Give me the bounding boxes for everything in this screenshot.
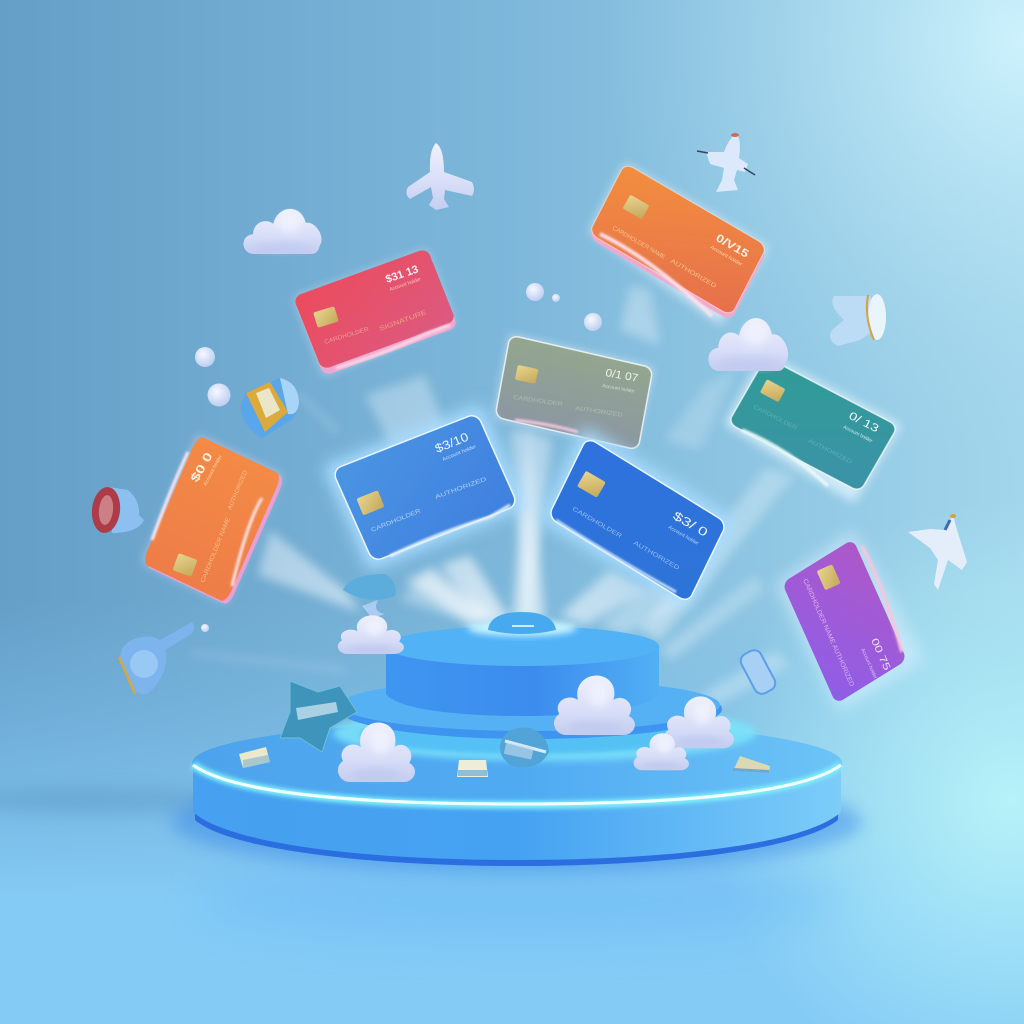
card: orange top right: AUTHORIZED bbox=[669, 259, 718, 290]
card: red: $31 13 bbox=[384, 263, 420, 286]
card: blue right: $3/ 0 bbox=[670, 508, 711, 540]
cloud: front right bbox=[664, 696, 734, 748]
cloud: front left bbox=[338, 722, 415, 782]
card: red: SIGNATURE bbox=[378, 309, 428, 333]
icon: small box left bbox=[239, 747, 270, 768]
card: red: CARDHOLDER bbox=[324, 327, 370, 346]
cloud: on podium top bbox=[338, 615, 404, 654]
card: blue left: Account holder bbox=[442, 444, 477, 463]
card: blue left: CARDHOLDER bbox=[371, 508, 423, 534]
cloud: small front bbox=[634, 733, 689, 770]
podium: base disc bbox=[172, 721, 862, 872]
card: blue right bbox=[548, 437, 727, 603]
card: blue right: Account holder bbox=[667, 525, 700, 547]
card: blue left: $3/10 bbox=[433, 430, 471, 456]
icon: blue star bbox=[280, 681, 357, 752]
card: grey-olive: CARDHOLDER bbox=[513, 395, 564, 408]
cloud: upper right bbox=[708, 318, 788, 371]
card: purple bbox=[775, 530, 925, 712]
card: teal: 0/ 13 bbox=[847, 410, 881, 435]
icon: red coin cylinder bbox=[90, 486, 144, 534]
card: blue right: AUTHORIZED bbox=[632, 541, 681, 572]
card: grey-olive: Account holder bbox=[602, 383, 636, 395]
cloud: upper left bbox=[243, 209, 322, 254]
card: orange top right: CARDHOLDER NAME bbox=[611, 226, 666, 261]
light beams bbox=[190, 285, 795, 705]
card: orange left: Account holder bbox=[202, 454, 224, 487]
card: blue left bbox=[332, 413, 518, 562]
spheres bbox=[195, 283, 602, 632]
card: purple: CARDHOLDER NAME AUTHORIZED bbox=[801, 578, 855, 688]
card: purple: Account holder bbox=[859, 647, 878, 680]
card: teal: AUTHORIZED bbox=[807, 438, 853, 466]
icon: cup top right bbox=[830, 294, 886, 346]
icon: blue half-circle badge bbox=[500, 728, 549, 767]
icon: small tablet centre bbox=[343, 574, 396, 618]
podium: button bbox=[467, 612, 577, 636]
icon: yellow-blue cylinder bbox=[241, 378, 299, 438]
card: orange left: CARDHOLDER NAME bbox=[200, 517, 232, 584]
podium: middle tier bbox=[333, 679, 757, 761]
card: orange top right bbox=[589, 163, 768, 325]
icon: small box centre bbox=[457, 760, 488, 777]
icon: bird right bbox=[908, 514, 967, 590]
card: teal: CARDHOLDER bbox=[752, 404, 798, 432]
card: purple: 00 75 bbox=[868, 637, 892, 673]
card: orange top right: 0/V15 bbox=[714, 232, 751, 261]
card: orange left: AUTHORIZED bbox=[227, 469, 250, 511]
card: red: Account holder bbox=[389, 276, 422, 293]
icon: blob plane left bbox=[119, 622, 194, 694]
card: blue right: CARDHOLDER bbox=[571, 507, 623, 540]
card: grey-olive: 0/1 07 bbox=[604, 367, 639, 385]
icon: small tablet right bbox=[738, 647, 778, 697]
card: orange left bbox=[142, 435, 285, 606]
card: blue left: AUTHORIZED bbox=[435, 476, 488, 501]
card: teal: Account holder bbox=[842, 424, 874, 444]
icon: plane top centre bbox=[406, 143, 474, 210]
card: red bbox=[293, 248, 458, 377]
podium: top cylinder bbox=[385, 626, 659, 716]
card: grey-olive bbox=[495, 335, 653, 450]
card: orange left: $0 0 bbox=[187, 449, 216, 484]
card: grey-olive: AUTHORIZED bbox=[575, 406, 624, 419]
card: teal bbox=[728, 357, 898, 499]
card: orange top right: Account holder bbox=[709, 245, 743, 268]
icon: small box right bbox=[733, 756, 770, 773]
cloud: front centre bbox=[554, 675, 635, 735]
icon: plane top right bbox=[697, 133, 755, 192]
